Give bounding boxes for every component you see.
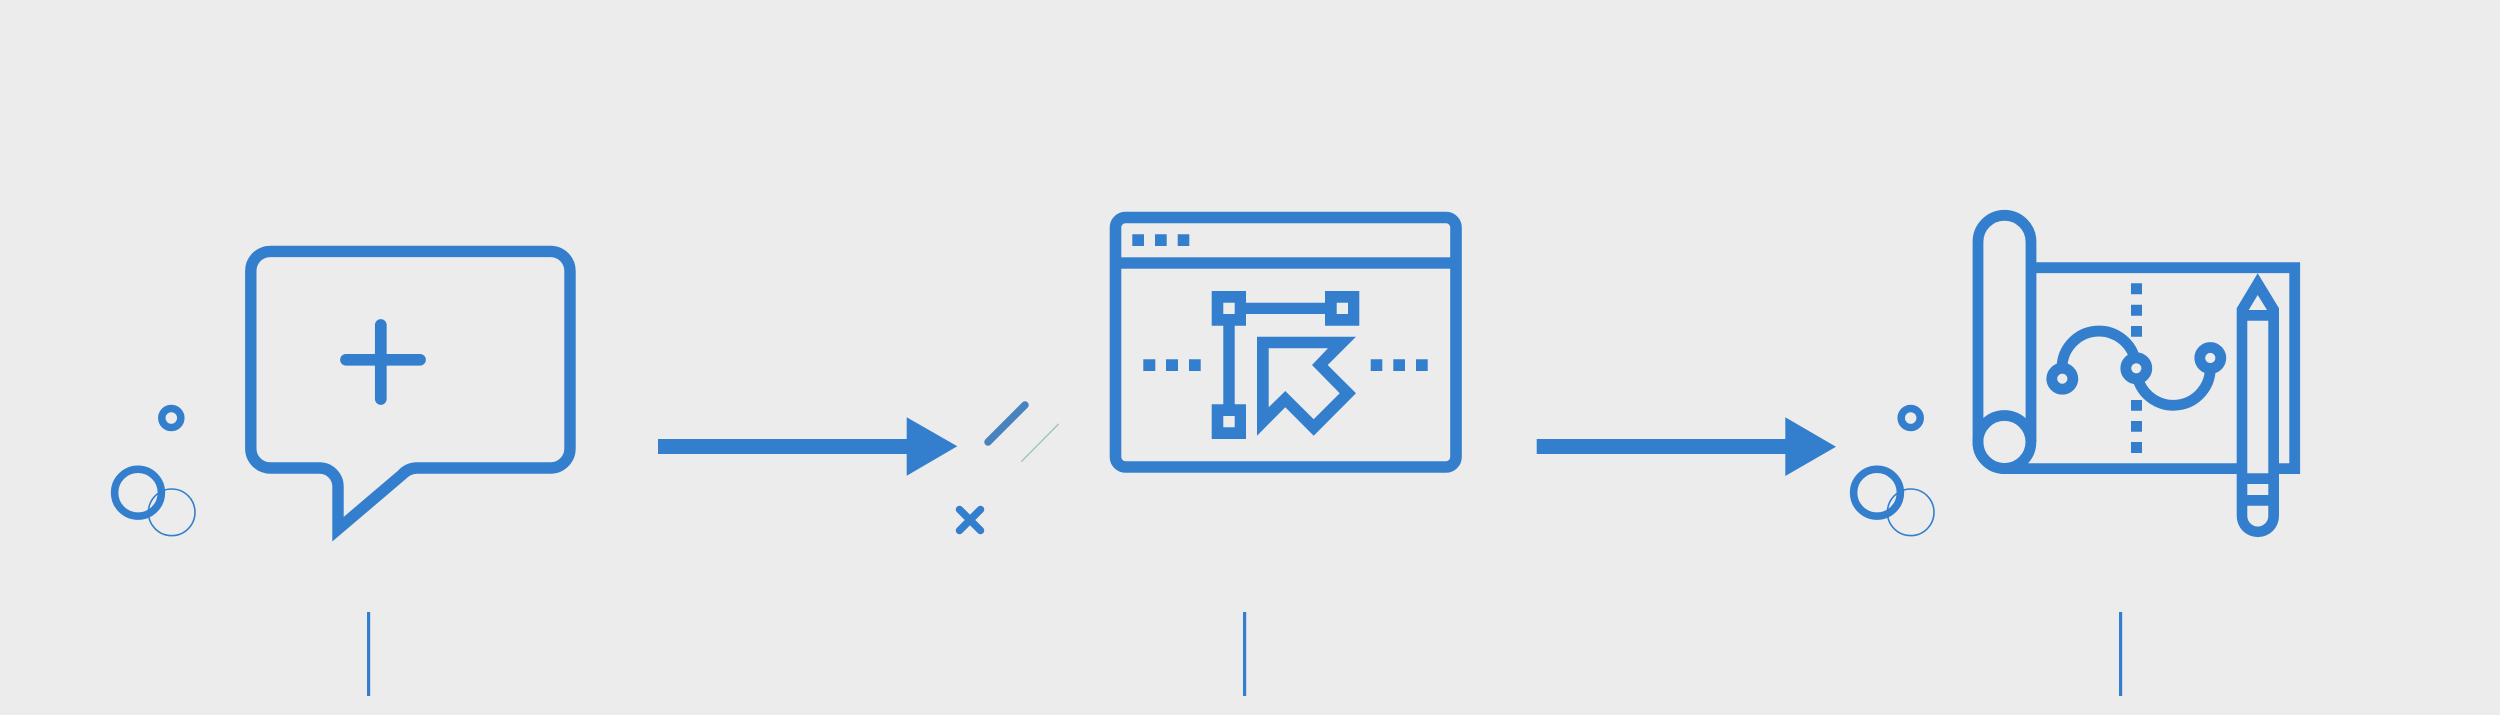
icon: browser window with vector cursor xyxy=(1115,218,1456,467)
scroll roll xyxy=(1978,215,2031,469)
header dots xyxy=(1132,234,1189,246)
arrow: second step to third step xyxy=(1537,417,1836,476)
icon: blueprint scroll with pencil xyxy=(1978,215,2295,537)
curve nodes xyxy=(2052,348,2221,389)
small ring xyxy=(162,408,181,428)
large ring xyxy=(115,469,161,516)
window frame xyxy=(1116,218,1456,467)
pencil xyxy=(2237,273,2279,537)
arrow head xyxy=(1785,417,1836,476)
arrow head xyxy=(907,417,957,476)
sheet bottom xyxy=(2004,463,2237,474)
sheet top and right xyxy=(2031,268,2295,469)
roll end circle xyxy=(1978,416,2031,468)
decoration: circles right xyxy=(1854,408,1934,536)
thin ring xyxy=(1887,489,1934,536)
arrow shaft xyxy=(658,439,907,454)
thin dash xyxy=(1022,424,1058,461)
arrow: first step to second step xyxy=(658,417,957,476)
bubble outline xyxy=(251,251,570,529)
cursor xyxy=(1257,337,1356,436)
step marker line 3 xyxy=(2119,612,2122,696)
cross xyxy=(960,510,980,530)
step marker line 1 xyxy=(367,612,370,696)
decoration: dashes and cross xyxy=(960,405,1058,530)
thick dash xyxy=(988,405,1025,442)
left dots xyxy=(1143,359,1201,371)
icon: speech bubble with plus xyxy=(251,251,570,529)
vector path handles xyxy=(1212,291,1359,439)
window header bar xyxy=(1115,257,1456,269)
large ring xyxy=(1854,469,1900,516)
bezier curve xyxy=(2062,331,2210,405)
thin ring xyxy=(148,489,195,536)
step marker line 2 xyxy=(1243,612,1246,696)
right dots xyxy=(1371,359,1428,371)
plus sign xyxy=(346,325,420,399)
decoration: circles left xyxy=(115,408,195,536)
centre guide dots xyxy=(2131,283,2142,453)
small ring xyxy=(1901,408,1920,428)
arrow shaft xyxy=(1537,439,1786,454)
